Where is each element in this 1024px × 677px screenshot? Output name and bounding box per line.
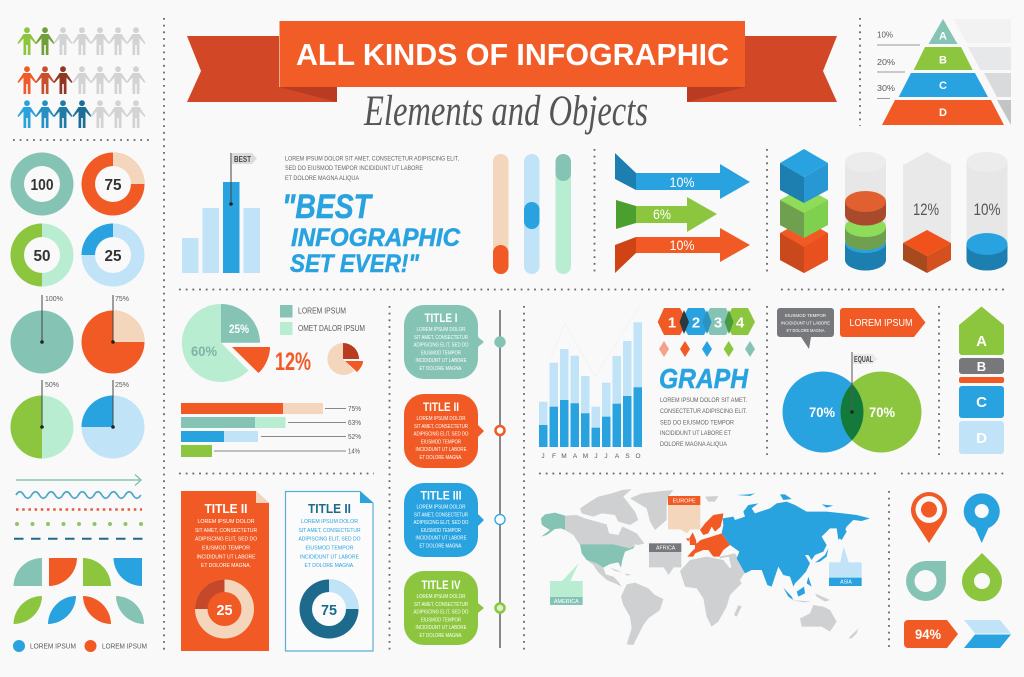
donut 25 <box>195 580 254 638</box>
wave line <box>16 492 141 498</box>
corner fold <box>256 491 269 503</box>
pyramid letters <box>939 30 947 119</box>
orange strip <box>959 377 1004 383</box>
europe <box>686 513 730 557</box>
speech callout: ET DOLORE MAGNA <box>786 328 825 334</box>
quote: INFOGRAPHIC <box>291 224 461 252</box>
people row: orange <box>18 66 146 94</box>
cylinder 10% <box>966 152 1008 270</box>
month labels: J <box>604 453 608 460</box>
label: africa: AFRICA <box>656 546 676 552</box>
panel: pyramid <box>877 19 1011 125</box>
lorem text: ET DOLORE MAGNA ALIQUA <box>285 175 360 182</box>
lorem text: SED DO EIUSMOD TEMPOR INCIDIDUNT UT LABORE <box>285 165 424 172</box>
document text <box>298 519 361 569</box>
venn diagram <box>782 352 922 452</box>
graph text: INCIDIDUNT UT LABORE ET <box>660 430 731 437</box>
bar chart <box>182 153 260 273</box>
panel: timeline <box>404 305 506 648</box>
12 percent: 12% <box>275 348 311 376</box>
left ribbon <box>187 36 337 102</box>
tag 94% <box>904 620 958 648</box>
panel: people pictograms <box>18 27 146 128</box>
subtitle: Elements and Objects <box>363 88 648 135</box>
slider orange <box>493 154 508 274</box>
bubble: title I: LOREM IPSUM DOLOR <box>416 327 466 333</box>
right ribbon <box>687 36 837 102</box>
block C: C <box>976 394 987 411</box>
pie 75% <box>82 295 144 374</box>
bubble: title III: ET DOLORE MAGNA. <box>420 544 462 550</box>
bubble: title II: TITLE II <box>423 400 459 414</box>
americas <box>541 489 673 645</box>
small pie <box>327 343 363 375</box>
legend <box>13 640 147 652</box>
block A <box>959 306 1004 355</box>
panel: donut charts <box>10 152 144 286</box>
numbered hexagons: 1 <box>668 314 676 332</box>
quote: "BEST <box>282 188 374 226</box>
label: europe: EUROPE <box>673 499 696 505</box>
document text: SIT AMET, CONSECTETUR <box>298 528 360 534</box>
panel: world map <box>541 489 870 645</box>
month labels: J <box>594 453 598 460</box>
bubble: title IV: ET DOLORE MAGNA. <box>420 633 462 639</box>
document text <box>195 519 257 569</box>
bubble: title I: EIUSMOD TEMPOR <box>421 350 461 356</box>
arrow line <box>16 474 141 486</box>
people row: green <box>18 27 146 55</box>
bubble: title II: ET DOLORE MAGNA. <box>420 455 462 461</box>
legend: LOREM IPSUM <box>102 642 147 650</box>
block C <box>959 386 1004 418</box>
pie 50%: 50% <box>45 382 59 389</box>
bar 14% <box>181 445 360 457</box>
arrow 10% blue: 10% <box>670 174 694 190</box>
icon: teal drop <box>906 561 946 601</box>
bubble: title I <box>404 305 484 379</box>
panel: pie with legend <box>182 304 365 382</box>
grey north and south america <box>565 489 673 645</box>
graph text: LOREM IPSUM DOLOR SIT AMET. <box>660 397 747 404</box>
people row: blue <box>18 100 146 128</box>
bubble: title IV <box>404 571 484 645</box>
month labels: S <box>625 453 630 460</box>
month labels: M <box>561 453 567 460</box>
graph heading: GRAPH <box>659 363 749 394</box>
bubble: title III: TITLE III <box>420 488 462 502</box>
bubble: title IV: TITLE IV <box>422 578 460 592</box>
block D: D <box>976 430 987 447</box>
block B <box>959 358 1004 374</box>
document text: ET DOLORE MAGNA. <box>201 563 251 569</box>
numbered hexagons <box>658 308 755 335</box>
panel: best infographic <box>182 153 461 278</box>
numbered hexagons: 4 <box>736 314 745 332</box>
asia <box>722 493 870 600</box>
donut 25: 25 <box>216 602 232 619</box>
pie 25% <box>82 380 144 458</box>
lorem text: LOREM IPSUM DOLOR SIT AMET, CONSECTETUR ADIPISCING ELIT, <box>285 156 459 162</box>
panel: orange document <box>181 491 269 651</box>
bubble: title I: ET DOLORE MAGNA. <box>420 366 462 372</box>
timeline axis <box>499 310 501 648</box>
donut 75 <box>300 580 358 638</box>
corner fold <box>360 492 373 503</box>
panel: arrows <box>615 153 750 273</box>
document text: ADIPISCING ELIT, SED DO <box>298 536 361 542</box>
pyramid letters: D <box>939 107 947 119</box>
green dotted line <box>17 522 143 526</box>
speech callout: INCIDIDUNT UT LABORE <box>781 320 830 326</box>
pyramid letters: B <box>939 54 947 66</box>
main pie <box>182 304 270 382</box>
document title: TITLE II <box>204 501 248 516</box>
pie legend <box>280 305 365 335</box>
ribbon folds <box>279 87 745 102</box>
eurasia, africa and oceania <box>680 493 870 638</box>
best flag: BEST <box>234 155 251 164</box>
panel: isometric stacks <box>780 149 1008 273</box>
lorem tag <box>840 308 926 337</box>
bar 75%: 75% <box>348 404 361 413</box>
navy dashed line <box>14 538 143 540</box>
panel: pins and tags <box>904 492 1011 648</box>
bubble: title III <box>404 483 484 557</box>
numbered hexagons: 2 <box>692 314 700 332</box>
bubble: title I: INCIDIDUNT UT LABORE <box>416 358 467 364</box>
main pie: 25% <box>229 322 249 336</box>
month labels: M <box>583 453 588 460</box>
block B: B <box>977 359 986 374</box>
hex column 12%: 12% <box>913 200 939 219</box>
legend: LOREM IPSUM <box>30 642 76 650</box>
red dotted line <box>16 508 142 511</box>
donut 75: 75 <box>321 602 337 619</box>
icon: orange pin <box>911 492 947 543</box>
lorem tag: LOREM IPSUM <box>850 318 912 329</box>
title banner <box>187 21 837 102</box>
pie 75%: 75% <box>115 296 129 303</box>
quote <box>282 188 461 278</box>
graph text: SED DO EIUSMOD TEMPOR <box>660 420 734 426</box>
graph text <box>660 397 747 448</box>
bubble: title III: INCIDIDUNT UT LABORE <box>416 536 467 542</box>
lorem text <box>285 156 459 182</box>
month labels: A <box>573 453 578 460</box>
document text: INCIDIDUNT UT LABORE <box>300 554 359 560</box>
speech callout <box>777 308 834 349</box>
panel: pie charts with pointers <box>10 295 144 458</box>
arrow 6% green: 6% <box>653 206 671 222</box>
pyramid levels <box>882 19 1004 125</box>
chevron <box>964 620 1011 648</box>
cube stack <box>780 149 828 273</box>
document text: INCIDIDUNT UT LABORE <box>196 554 256 560</box>
pie 100% <box>10 295 74 374</box>
slider green <box>556 154 571 274</box>
month labels: A <box>615 453 620 460</box>
numbered hexagons: 3 <box>714 314 722 332</box>
pie 25%: 25% <box>115 382 129 389</box>
hex column 12% <box>903 152 951 273</box>
graph text: DOLORE MAGNA ALIQUA <box>660 441 728 448</box>
bar 52%: 52% <box>348 432 361 441</box>
timeline nodes <box>494 336 506 612</box>
quarter circles <box>14 558 142 586</box>
arrow 10% orange: 10% <box>670 237 694 253</box>
bubble: title III: LOREM IPSUM DOLOR <box>416 504 466 510</box>
bubble: title II: ADIPISCING ELIT, SED DO <box>414 432 469 438</box>
document text: LOREM IPSUM DOLOR <box>301 519 358 525</box>
document text: ADIPISCING ELIT, SED DO <box>195 536 257 542</box>
document text: SIT AMET, CONSECTETUR <box>195 528 257 534</box>
donut 50: 50 <box>34 248 51 265</box>
bubble: title III: SIT AMET, CONSECTETUR <box>414 512 468 518</box>
quote: SET EVER!" <box>290 250 420 278</box>
month labels: F <box>552 453 556 460</box>
icon: green drop <box>962 553 1002 601</box>
icon: blue pin <box>964 493 1000 543</box>
pyramid labels: 30% <box>877 84 895 93</box>
pie legend: LOREM IPSUM <box>298 306 346 316</box>
cylinder stack <box>845 152 886 270</box>
bubble: title II: LOREM IPSUM DOLOR <box>416 416 466 422</box>
month labels: J <box>541 453 545 460</box>
bubble: title IV: SIT AMET, CONSECTETUR <box>414 602 468 608</box>
bubble: title IV: INCIDIDUNT UT LABORE <box>416 625 467 631</box>
label: america: AMERICA <box>554 599 579 605</box>
bubble: title II: SIT AMET, CONSECTETUR <box>414 424 468 430</box>
bubble: title IV: LOREM IPSUM DOLOR <box>416 594 466 600</box>
bubble: title I: TITLE I <box>424 311 458 325</box>
month labels <box>541 453 641 460</box>
label: europe <box>668 496 700 533</box>
bubble: title II: INCIDIDUNT UT LABORE <box>416 447 467 453</box>
pyramid letters: C <box>939 80 947 92</box>
document text: LOREM IPSUM DOLOR <box>198 519 254 525</box>
tag 94%: 94% <box>915 626 942 642</box>
pie 100%: 100% <box>45 296 63 303</box>
best flag <box>232 153 257 164</box>
bar 63% <box>181 417 361 428</box>
label: africa <box>649 543 681 575</box>
donut 100: 100 <box>30 177 54 194</box>
block D <box>959 421 1004 454</box>
document sheet <box>181 491 269 651</box>
pyramid letters: A <box>939 30 947 42</box>
bubble: title IV: EIUSMOD TEMPOR <box>421 618 461 624</box>
main pie: 60% <box>191 343 218 359</box>
bar 52% <box>181 431 361 442</box>
alaska and usa highlighted <box>541 513 635 568</box>
cylinder 10%: 10% <box>974 200 1000 219</box>
panel: outlined document <box>286 492 373 651</box>
pie 50% <box>10 380 74 458</box>
panel: venn and callouts <box>777 308 926 452</box>
month labels: O <box>635 453 641 460</box>
map labels <box>550 496 862 605</box>
pyramid labels: 10% <box>877 30 893 40</box>
pyramid labels: 20% <box>877 58 895 67</box>
bar 63%: 63% <box>348 418 361 427</box>
panel: sliders <box>493 154 571 274</box>
donut 25: 25 <box>104 248 122 265</box>
speech callout: EIUSMOD TEMPOR <box>785 313 826 319</box>
bar 14%: 14% <box>348 446 360 456</box>
column chart <box>539 307 642 447</box>
bubble: title II <box>404 394 484 468</box>
venn diagram: 70% <box>869 404 896 420</box>
bubble: title III: ADIPISCING ELIT, SED DO <box>414 520 469 526</box>
equal label: EQUAL <box>854 355 873 364</box>
panel: horizontal bars <box>181 403 361 457</box>
panel: letter stack <box>959 306 1004 454</box>
pie legend: OMET DALOR IPSUM <box>298 324 365 333</box>
graph text: CONSECTETUR ADIPISCING ELIT. <box>660 408 747 415</box>
bubble: title I: SIT AMET, CONSECTETUR <box>414 335 468 341</box>
grey africa and oceania <box>680 496 858 638</box>
label: asia: ASIA <box>840 580 852 586</box>
block A: A <box>976 333 987 350</box>
bubble: title III: EIUSMOD TEMPOR <box>421 528 461 534</box>
label: america <box>550 563 583 605</box>
document sheet <box>286 492 373 651</box>
bubble: title I: ADIPISCING ELIT, SED DO <box>414 342 469 348</box>
venn diagram: 70% <box>809 404 836 420</box>
diamonds row <box>659 341 755 357</box>
bubble: title II: EIUSMOD TEMPOR <box>421 440 461 446</box>
label: asia <box>829 547 862 586</box>
document title: TITLE II <box>308 501 351 516</box>
panel: line styles <box>14 474 143 539</box>
document text: EIUSMOD TEMPOR <box>202 546 250 552</box>
bar 75% <box>181 403 361 414</box>
panel: graph <box>539 307 755 460</box>
slider blue <box>524 154 540 274</box>
pyramid shadow <box>954 19 1011 125</box>
bubble: title IV: ADIPISCING ELIT, SED DO <box>414 610 469 616</box>
donut 75: 75 <box>104 177 122 194</box>
title: ALL KINDS OF INFOGRAPHIC <box>296 37 729 72</box>
banner body <box>280 21 745 87</box>
document text: EIUSMOD TEMPOR <box>306 546 354 552</box>
document text: ET DOLORE MAGNA. <box>304 563 355 569</box>
pyramid labels <box>877 30 920 98</box>
leaves <box>14 596 144 624</box>
panel: quarter and leaf shapes <box>13 558 147 652</box>
